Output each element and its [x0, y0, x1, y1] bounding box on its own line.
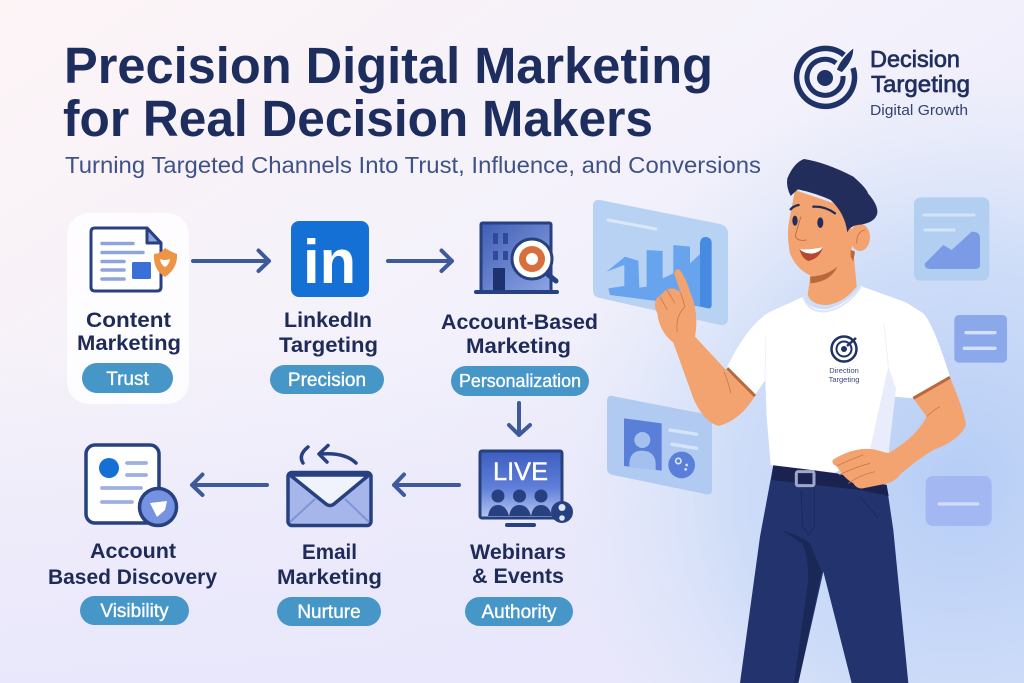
badge: Visibility: Visibility	[100, 601, 169, 622]
icon: building and magnifier	[476, 223, 557, 292]
panel: Content Marketing	[67, 213, 189, 404]
label: Marketing	[466, 335, 571, 358]
title	[63, 37, 713, 147]
pointing arm and hand	[655, 269, 755, 426]
label	[48, 540, 217, 589]
icon: envelope	[288, 446, 371, 526]
body in zoom coordinates	[655, 159, 966, 488]
label: Email	[302, 541, 357, 564]
label: Account	[90, 540, 176, 563]
label: Targeting	[279, 334, 378, 357]
badge: Visibility	[80, 596, 189, 625]
head	[788, 190, 853, 276]
icon: LinkedIn	[291, 221, 369, 297]
shirt logo: Direction	[829, 366, 859, 375]
badge: Personalization: Personalization	[459, 371, 581, 391]
floating card: single line	[926, 476, 992, 526]
bars	[607, 237, 712, 308]
panel: Webinars and Events	[465, 451, 573, 626]
trousers and belt	[740, 465, 908, 683]
label: Account-Based	[441, 311, 598, 334]
face details	[792, 216, 798, 226]
icon: LinkedIn: in	[303, 228, 356, 297]
shirt	[727, 286, 950, 473]
logo text	[870, 46, 970, 119]
label: & Events	[472, 565, 564, 588]
label	[470, 541, 566, 588]
label: LinkedIn	[284, 309, 372, 332]
label: Based Discovery	[48, 566, 217, 589]
badge: Authority: Authority	[482, 602, 557, 623]
arrow: webinars to email	[394, 474, 459, 495]
icon: live monitor: LIVE	[493, 458, 548, 486]
label: Marketing	[77, 332, 181, 355]
badge: Precision	[270, 365, 384, 394]
panel: Email Marketing	[277, 446, 382, 626]
badge: Authority	[465, 597, 573, 626]
icon: live monitor	[480, 451, 573, 525]
badge: Nurture	[277, 597, 381, 626]
panel: LinkedIn Targeting	[270, 221, 384, 394]
badge: Personalization	[451, 366, 589, 396]
arrow: email to discovery	[192, 474, 267, 495]
panel: Account-Based Marketing	[441, 223, 598, 396]
label: Content	[86, 309, 171, 332]
hair	[787, 159, 877, 232]
arrow: ABM to webinars	[509, 403, 530, 435]
shirt logo: Targeting	[829, 375, 859, 384]
panel: Account Based Discovery	[48, 445, 217, 625]
icon: target with dart	[797, 47, 855, 106]
arm on hip and hand	[832, 377, 966, 488]
subtitle: Turning Targeted Channels Into Trust, Influence, and Conversions	[65, 152, 761, 178]
character: presenter	[655, 159, 966, 683]
floating card: bar chart	[593, 200, 728, 325]
arrow: content to LinkedIn	[193, 250, 269, 271]
label	[279, 309, 378, 357]
badge: Trust	[82, 363, 173, 393]
label: Marketing	[277, 566, 382, 589]
label	[77, 309, 181, 355]
badge: Precision: Precision	[288, 370, 366, 391]
floating card: text lines	[954, 315, 1007, 363]
neck	[808, 250, 857, 305]
shirt logo	[829, 336, 859, 384]
logo text: Digital Growth	[870, 102, 968, 119]
title: Precision Digital Marketing	[64, 37, 713, 94]
badge: Nurture: Nurture	[297, 602, 361, 623]
icon: profile document with badge	[86, 445, 176, 526]
logo: Decision Targeting	[797, 46, 970, 119]
badge: Trust: Trust	[106, 369, 150, 390]
logo text: Decision	[870, 46, 960, 72]
arrow: LinkedIn to ABM	[388, 250, 452, 271]
icon: document with shield	[91, 228, 177, 291]
title: for Real Decision Makers	[63, 90, 653, 147]
logo text: Targeting	[871, 71, 970, 97]
floating card: profile	[607, 396, 712, 494]
label	[441, 311, 598, 358]
label: Webinars	[470, 541, 566, 564]
floating card: area chart	[914, 197, 989, 281]
label	[277, 541, 382, 589]
